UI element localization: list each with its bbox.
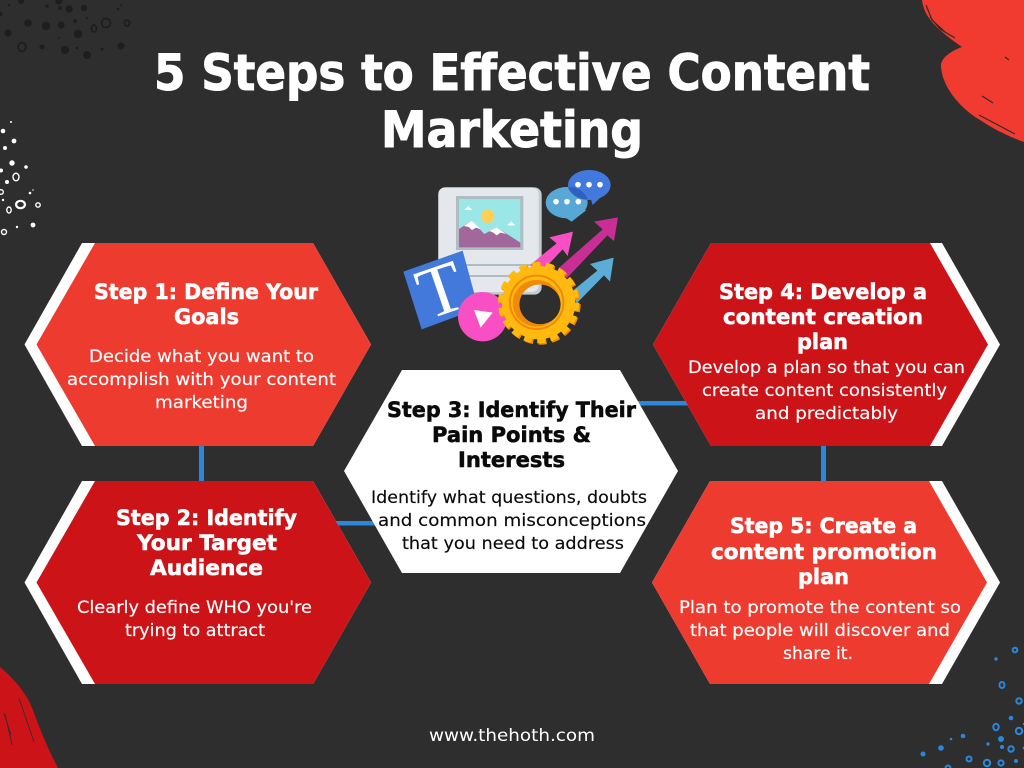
icon: speech bubbles <box>546 170 611 222</box>
step 2 heading: Step 2: Identify <box>116 506 297 530</box>
title: Marketing <box>381 101 643 159</box>
step 2 description <box>77 598 312 640</box>
step 3 description: and common misconceptions <box>378 511 646 530</box>
step 1 heading <box>94 280 319 329</box>
step 2 description: Clearly define WHO you're <box>77 598 312 617</box>
panel: step 3 <box>344 370 678 573</box>
step 5 description: Plan to promote the content so <box>679 598 961 617</box>
panel: step 5 <box>652 481 1000 684</box>
step 1 description: marketing <box>155 393 248 412</box>
step 4 heading <box>719 280 927 354</box>
blue splatter bottom right <box>920 648 1024 768</box>
icon: arrows <box>530 217 618 303</box>
step 4 description <box>688 358 965 423</box>
step 1 description: accomplish with your content <box>67 370 337 389</box>
icon: T tile: T <box>406 244 475 335</box>
title <box>154 44 870 159</box>
step 1 description: Decide what you want to <box>89 347 314 366</box>
step 3 heading: Step 3: Identify Their <box>387 398 637 422</box>
panel: step 2 <box>24 481 371 684</box>
panel: step 4 <box>653 243 1000 446</box>
red brush stroke top right <box>922 0 1024 142</box>
red brush stroke bottom left <box>0 667 58 768</box>
step 3 description <box>371 488 647 553</box>
step 5 heading: Step 5: Create a <box>730 514 917 538</box>
white splatter left <box>0 121 40 234</box>
step 1 heading: Goals <box>174 305 239 329</box>
step 1 description <box>67 347 337 412</box>
step 2 heading: Your Target <box>136 531 277 555</box>
panel: step 1 <box>24 243 371 446</box>
title: 5 Steps to Effective Content <box>154 44 870 102</box>
step 4 description: and predictably <box>755 404 898 423</box>
step 2 heading <box>116 506 297 580</box>
step 5 heading: content promotion <box>711 540 937 564</box>
step 3 description: that you need to address <box>402 534 624 553</box>
step 4 heading: Step 4: Develop a <box>719 280 927 304</box>
step 3 heading: Interests <box>458 448 565 472</box>
step 5 heading <box>711 514 937 589</box>
icon: gear <box>502 266 577 341</box>
step 1 heading: Step 1: Define Your <box>94 280 319 304</box>
icon: content marketing illustration <box>403 170 618 341</box>
step 5 description: that people will discover and <box>690 621 950 640</box>
step 4 heading: content creation <box>723 305 923 329</box>
icon: document with picture <box>438 187 542 295</box>
step 4 heading: plan <box>797 330 848 354</box>
step 5 description <box>679 598 961 663</box>
step 4 description: Develop a plan so that you can <box>688 358 965 377</box>
connector lines <box>199 401 826 526</box>
step 5 description: share it. <box>783 644 853 663</box>
footer url: www.thehoth.com <box>429 726 595 746</box>
step 5 heading: plan <box>798 565 849 589</box>
step 4 description: create content consistently <box>702 381 947 400</box>
step 2 heading: Audience <box>150 556 263 580</box>
icon: play button <box>458 292 507 341</box>
step 3 description: Identify what questions, doubts <box>371 488 647 507</box>
step 2 description: trying to attract <box>125 621 266 640</box>
step 3 heading <box>387 398 637 472</box>
step 3 heading: Pain Points & <box>432 423 591 447</box>
dark splatter top left <box>0 0 130 59</box>
